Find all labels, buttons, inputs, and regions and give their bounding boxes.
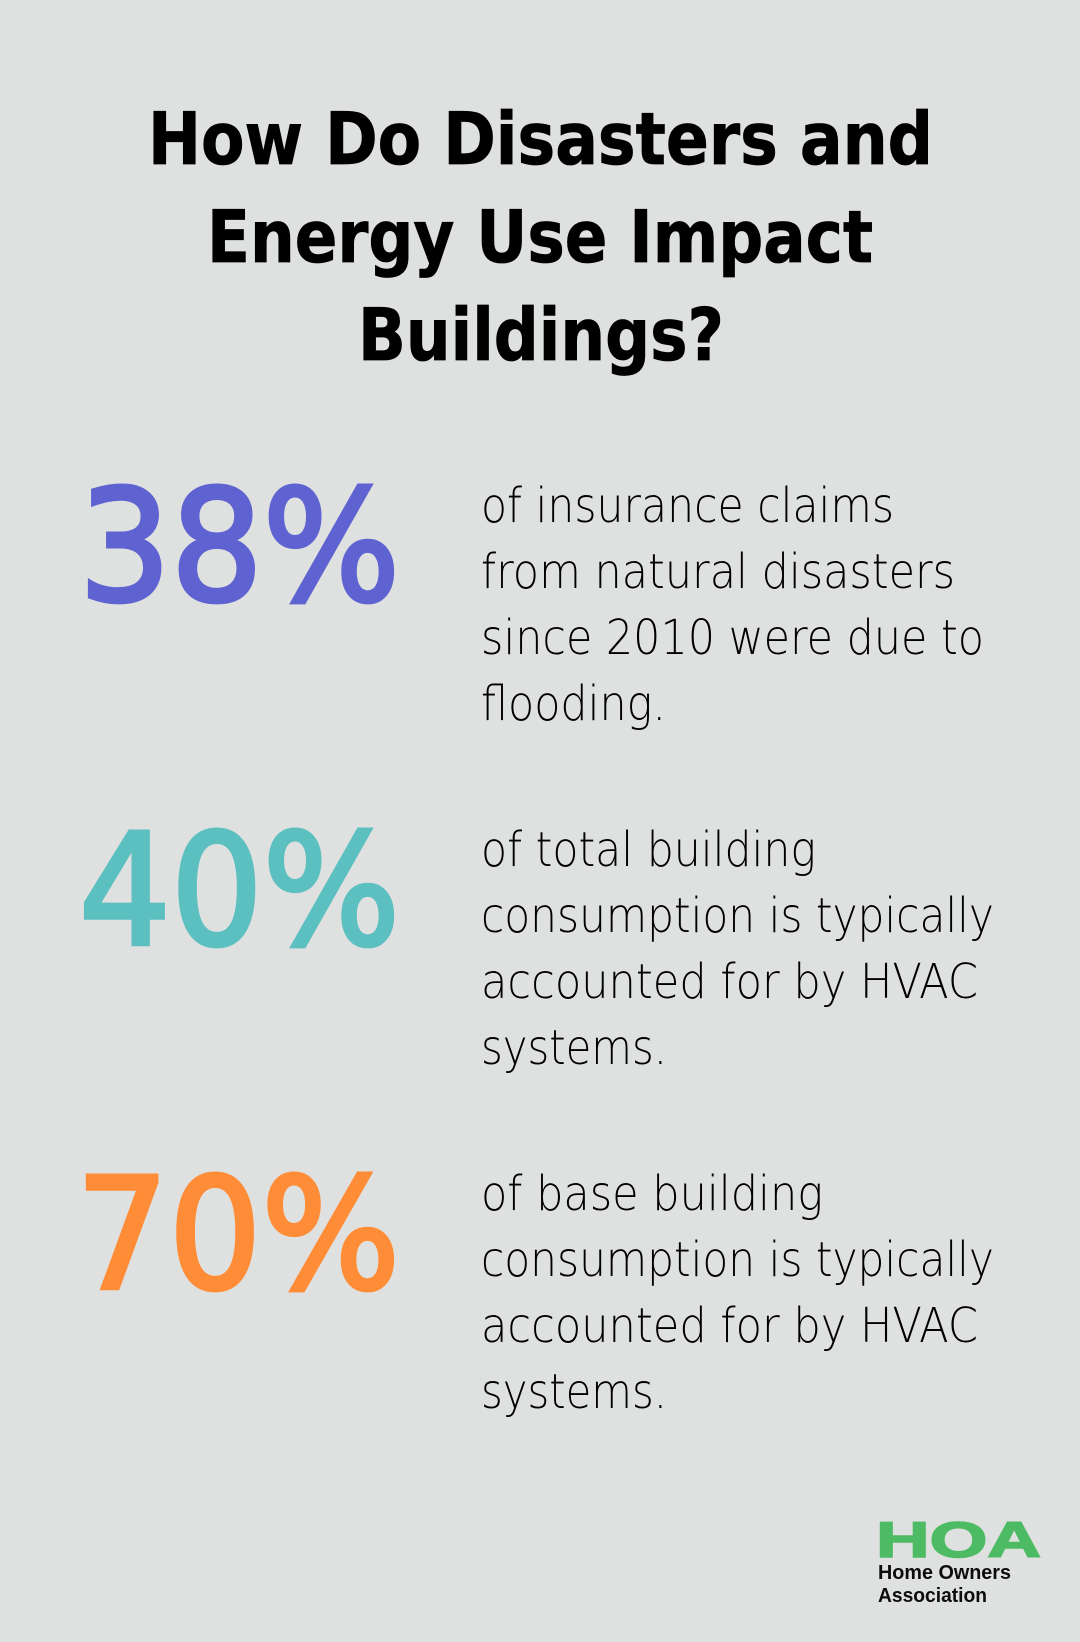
number: 40%: 40% (79, 802, 400, 981)
text: base consumption description: of base building (481, 1166, 823, 1222)
logo: Home Owners Association: Home Owners (878, 1562, 1011, 1584)
text: base consumption description: systems. (481, 1364, 667, 1420)
panel: base building consumption statistic (76, 1146, 994, 1420)
logo: Home Owners Association: HOA (876, 1512, 1041, 1568)
logo: Home Owners Association (876, 1512, 1041, 1607)
title (148, 97, 933, 377)
text: base consumption description (481, 1166, 994, 1420)
text: flooding description: from natural disasters (481, 544, 955, 600)
number: 38%: 38% (79, 458, 400, 637)
text: flooding description: since 2010 were due to (481, 610, 984, 666)
number: 70%: 70% (76, 1146, 400, 1325)
panel: total building consumption statistic (79, 802, 994, 1076)
logo: Home Owners Association: Association (878, 1585, 987, 1607)
text: base consumption description: accounted for by HVAC (481, 1298, 978, 1354)
text: flooding description: flooding. (481, 676, 666, 732)
text: flooding description (481, 478, 984, 732)
text: total consumption description: consumption is typically (481, 888, 994, 944)
panel: flooding statistic (79, 458, 984, 732)
text: total consumption description: accounted for by HVAC (481, 954, 978, 1010)
title: How Do Disasters and (148, 97, 933, 181)
text: total consumption description (481, 822, 994, 1076)
title: Buildings? (358, 293, 724, 377)
text: base consumption description: consumption is typically (481, 1232, 994, 1288)
text: total consumption description: systems. (481, 1020, 667, 1076)
title: Energy Use Impact (207, 195, 873, 279)
text: total consumption description: of total building (481, 822, 816, 878)
text: flooding description: of insurance claims (481, 478, 894, 534)
